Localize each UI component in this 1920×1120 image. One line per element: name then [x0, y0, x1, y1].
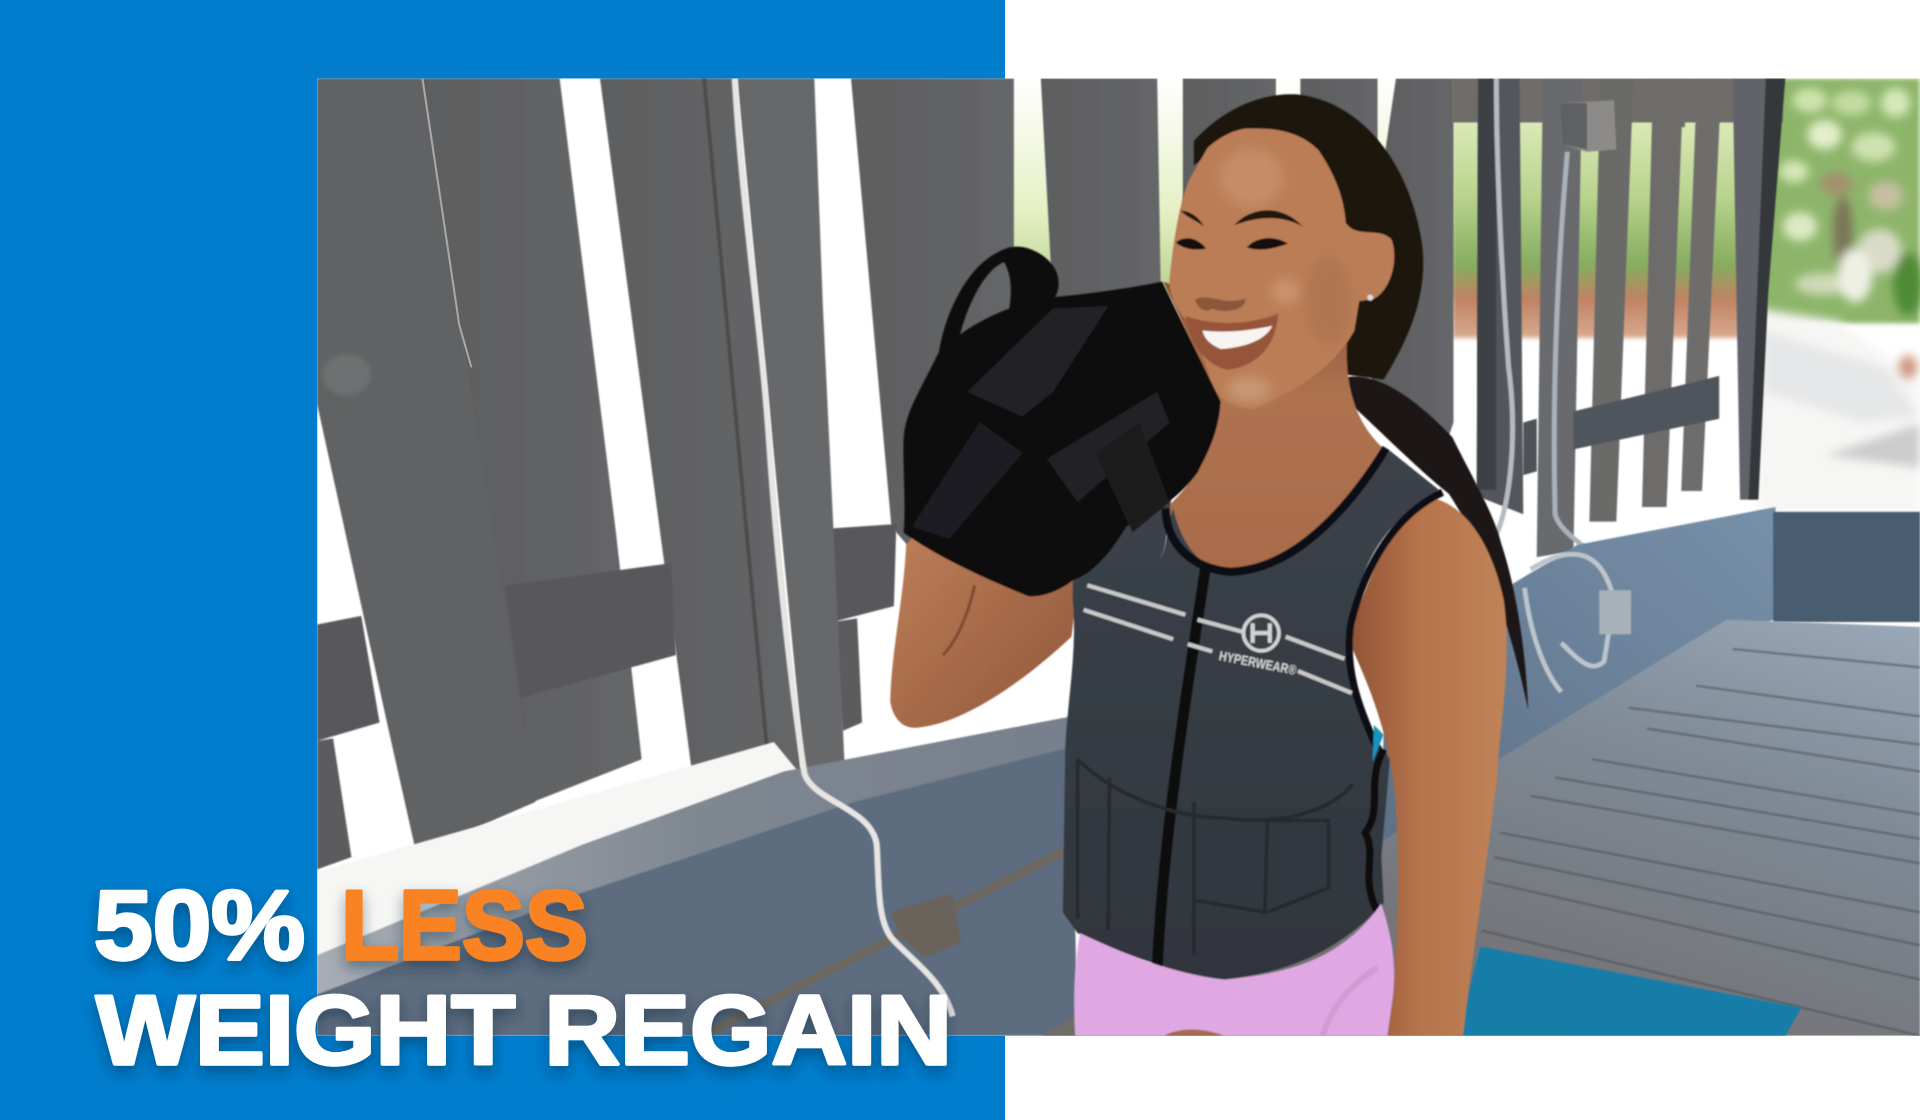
earring: [1367, 294, 1373, 301]
woman: [890, 94, 1528, 1036]
raised arm: [890, 514, 1084, 728]
nose: [1195, 297, 1245, 311]
junction box: [890, 893, 961, 958]
vest: [1063, 451, 1439, 980]
vest stripes: [1084, 585, 1352, 693]
fence post: [737, 78, 845, 780]
face: [1169, 128, 1394, 409]
blue background panel: [0, 0, 1005, 1120]
conduit pipe: [700, 847, 1071, 1036]
armhole binding: [1349, 492, 1442, 749]
front fence plank: [317, 78, 535, 853]
wall outlet box: [1599, 590, 1631, 634]
right arm and shoulder: [1347, 496, 1507, 1036]
pink shorts: [1074, 904, 1394, 1036]
ponytail: [1347, 377, 1528, 710]
shorts fold: [1322, 967, 1378, 1036]
right wall and dark recess: [1382, 506, 1920, 842]
gravel and pavement: [1757, 309, 1920, 512]
headline: [94, 870, 952, 1085]
yoga mat: [1457, 947, 1801, 1036]
eyes: [1247, 238, 1288, 250]
right fence section: [1452, 78, 1785, 588]
eyebrows: [1234, 210, 1303, 227]
zipper: [1157, 563, 1206, 970]
floor boards: [1041, 620, 1920, 1036]
headline line 2: WEIGHT REGAIN: WEIGHT REGAIN: [96, 975, 952, 1085]
side lacing: [1365, 749, 1384, 912]
vest pockets: [1078, 759, 1353, 955]
logo: [1243, 615, 1279, 651]
brand name: HYPERWEAR®: [1218, 648, 1298, 678]
light crack: [422, 78, 471, 367]
vest neckline binding: [1166, 448, 1386, 572]
photo: woman carrying weighted bag: [317, 78, 1920, 1036]
hair: [1194, 94, 1423, 380]
white cable: [735, 78, 953, 1016]
neck and chest: [1163, 282, 1386, 569]
teal inner top: [1373, 725, 1384, 762]
background trees: [1763, 78, 1920, 323]
weighted bag: [903, 282, 1221, 596]
wood knot: [322, 354, 371, 396]
bag handle: [939, 247, 1059, 355]
wall conduit: [1525, 554, 1614, 692]
headline line 1: 50%: 50%: [94, 870, 305, 980]
concrete ledge: [317, 716, 1078, 1036]
headline line 1: LESS: LESS: [341, 870, 588, 980]
fence rails: [317, 524, 896, 869]
elbow crease: [943, 585, 975, 655]
left fence planks: [422, 78, 1453, 804]
thigh skin: [1163, 1029, 1224, 1036]
teeth: [1202, 326, 1272, 349]
bag straps: [967, 306, 1108, 416]
gaps between right planks: [1452, 78, 1758, 338]
gaps between centre planks: [1010, 78, 1457, 299]
mouth: [1185, 313, 1278, 370]
